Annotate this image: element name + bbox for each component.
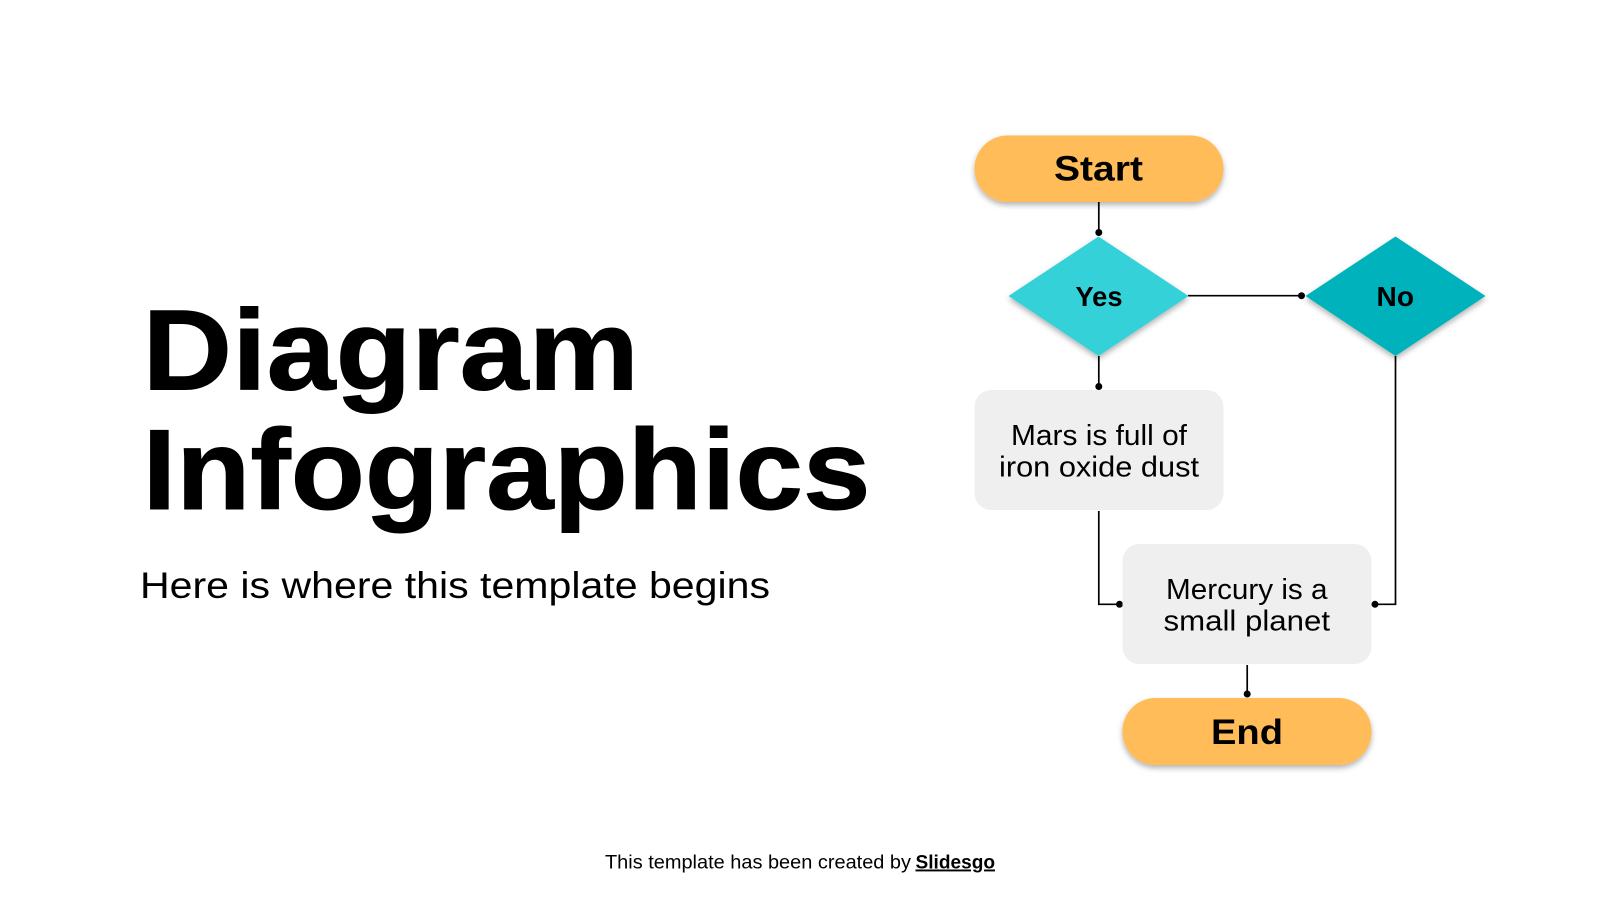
arrow: yes to mars bbox=[1095, 356, 1102, 390]
arrow: start to yes bbox=[1095, 202, 1102, 236]
start node: Start bbox=[1054, 150, 1143, 188]
title bbox=[142, 288, 870, 534]
subtitle: Here is where this template begins bbox=[140, 565, 770, 606]
title: Diagram bbox=[142, 288, 639, 414]
box: mercury: Mercury is a bbox=[1166, 574, 1328, 606]
footer credit: This template has been created by bbox=[605, 852, 912, 874]
arrow: yes to no bbox=[1188, 292, 1305, 299]
end node: End bbox=[1211, 713, 1283, 752]
decision: yes: Yes bbox=[1076, 281, 1122, 312]
box: mars: Mars is full of bbox=[1011, 420, 1188, 452]
title: Infographics bbox=[142, 407, 870, 534]
start node bbox=[974, 136, 1224, 202]
decision: yes bbox=[1008, 236, 1188, 356]
box: mars: iron oxide dust bbox=[999, 452, 1199, 484]
box: mars bbox=[974, 390, 1224, 510]
end node bbox=[1122, 698, 1372, 765]
arrow: mars to mercury bbox=[1099, 511, 1123, 608]
decision: no: No bbox=[1376, 281, 1414, 312]
flowchart bbox=[974, 136, 1486, 765]
box: mercury bbox=[1122, 544, 1372, 664]
box: mercury: small planet bbox=[1164, 606, 1330, 638]
footer credit: Slidesgo bbox=[916, 852, 995, 874]
arrow: mercury to end bbox=[1244, 665, 1251, 698]
arrow: no to mercury bbox=[1372, 356, 1396, 608]
decision: no bbox=[1306, 236, 1486, 356]
